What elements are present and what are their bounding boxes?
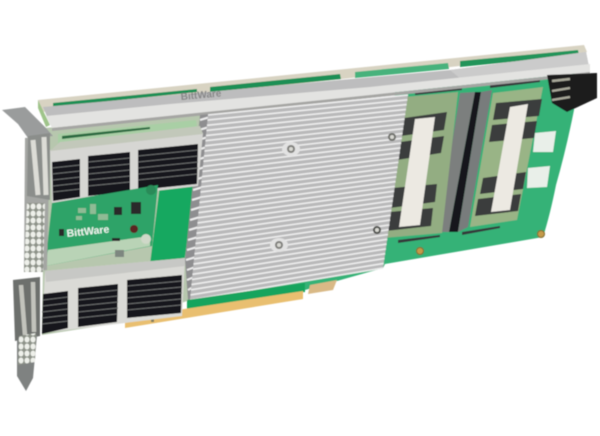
memory chips (475, 99, 542, 216)
top edge rail (38, 45, 587, 127)
cage fins (52, 144, 198, 201)
bottom network cages (42, 258, 185, 334)
bracket top tab (2, 107, 53, 138)
gold edge connector (125, 280, 337, 328)
memory module: left (383, 92, 458, 238)
card backing behind left section (42, 112, 208, 335)
lower port (13, 277, 40, 341)
memory chips (386, 112, 447, 231)
bracket mesh upper (24, 203, 45, 272)
main circuit board (150, 72, 575, 309)
memory socket slots (438, 90, 492, 232)
memory module: right (470, 87, 543, 227)
top cover plate (43, 52, 590, 131)
cover brand text: BittWare (180, 88, 222, 103)
white thermal pads (527, 131, 556, 188)
metal mounting bracket (2, 107, 53, 391)
board brand text: BittWare (66, 224, 110, 240)
mounting holes (416, 230, 544, 254)
heatsink screws (270, 133, 396, 252)
bracket tail (17, 335, 37, 391)
upper board strip under cover (58, 120, 198, 146)
heatsink top face (190, 95, 408, 300)
heatsink side (185, 114, 210, 300)
white label (491, 104, 528, 212)
board components (59, 202, 141, 241)
black power connector (547, 73, 597, 112)
small daughter circuit board (45, 185, 158, 266)
finned heatsink (185, 95, 408, 300)
upper port (27, 133, 50, 200)
white label (399, 117, 435, 227)
socket clip bottom (398, 235, 440, 243)
top network cages (50, 126, 203, 203)
